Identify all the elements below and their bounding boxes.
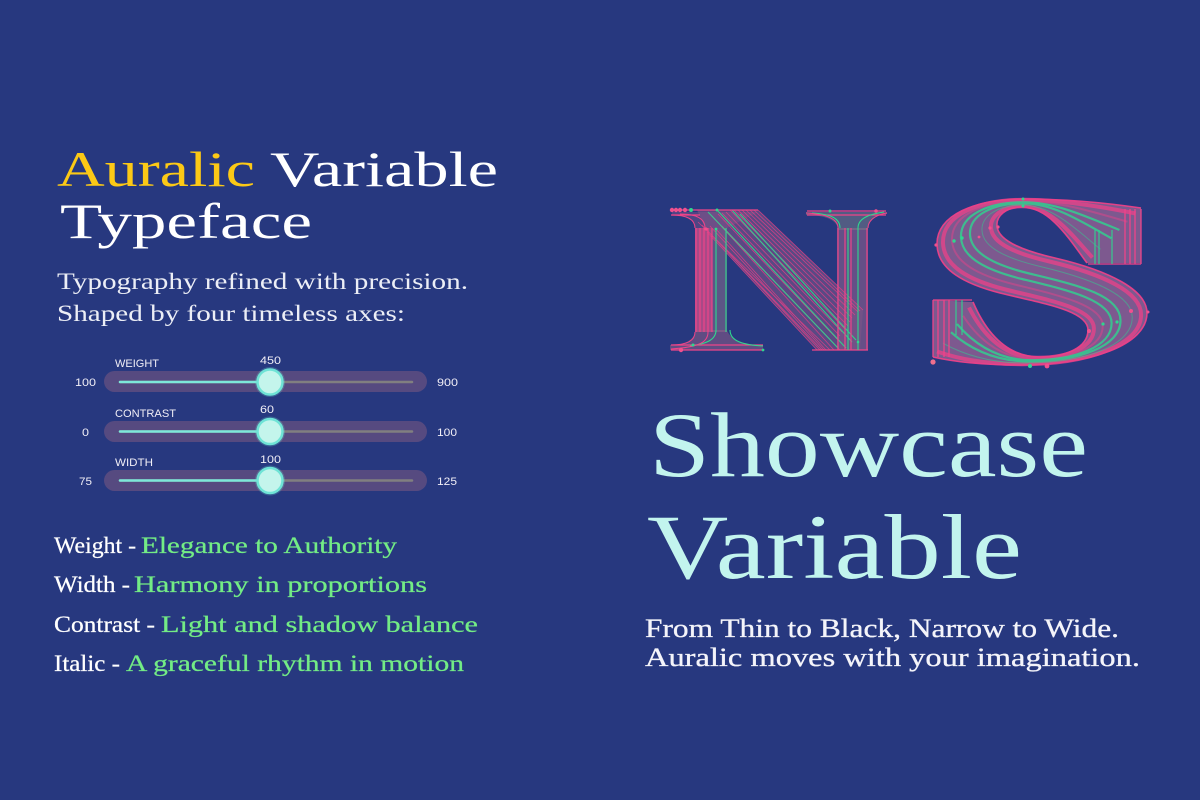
S terminals [933, 209, 1141, 357]
S anchor points [930, 198, 1150, 368]
N diagonal green lines [708, 210, 856, 348]
slider: weight [75, 355, 458, 397]
title: Auralic [57, 141, 255, 197]
S tinted body [933, 199, 1147, 365]
N tinted fills [670, 210, 887, 350]
slider: width: WIDTH [115, 457, 153, 469]
glyph illustration: letter S [930, 198, 1150, 368]
axis: contrast: Contrast - [54, 612, 155, 638]
S green core curves [943, 202, 1132, 363]
S green terminals [956, 230, 1112, 335]
axis: weight: Weight - [54, 533, 136, 559]
S pink edge curves [933, 199, 1147, 365]
S inner pink curves [937, 200, 1141, 364]
showcase heading [647, 394, 1088, 598]
slider: width: 100 [260, 454, 281, 466]
axis: width: Width - [54, 572, 130, 598]
title: Variable [270, 141, 498, 197]
intro text: Shaped by four timeless axes: [57, 301, 405, 326]
title [57, 141, 498, 249]
axis: italic [54, 651, 464, 677]
showcase caption [645, 614, 1140, 672]
title: Typeface [60, 193, 312, 249]
showcase heading: Showcase [649, 394, 1088, 496]
N anchor points [670, 208, 878, 352]
slider: width: 125 [437, 476, 457, 488]
slider: weight: WEIGHT [115, 358, 159, 370]
slider: contrast: 0 [82, 427, 89, 439]
intro text [57, 269, 468, 326]
glyph illustration: letter N [670, 208, 887, 352]
N stem lines [671, 210, 886, 350]
axis: italic: A graceful rhythm in motion [126, 651, 464, 677]
axis: weight: Elegance to Authority [141, 533, 397, 559]
axis: contrast [54, 612, 478, 638]
slider: weight: 900 [437, 377, 458, 389]
axis: weight [54, 533, 397, 559]
slider: contrast: CONTRAST [115, 408, 176, 420]
slider: weight: 100 [75, 377, 96, 389]
axis: width [54, 572, 427, 598]
intro text: Typography refined with precision. [57, 269, 468, 294]
axis list [54, 533, 478, 677]
axis: width: Harmony in proportions [134, 572, 427, 598]
slider: contrast: 100 [437, 427, 457, 439]
N stem green lines [690, 212, 884, 350]
slider: contrast: 60 [260, 404, 274, 416]
showcase caption: Auralic moves with your imagination. [645, 643, 1140, 672]
slider: width: 75 [79, 476, 92, 488]
N serif brackets [671, 213, 887, 349]
showcase caption: From Thin to Black, Narrow to Wide. [645, 614, 1119, 643]
slider: width [79, 454, 457, 496]
N diagonal pink lines [698, 210, 863, 350]
showcase heading: Variable [647, 496, 1022, 598]
slider: weight: 450 [260, 355, 281, 367]
slider panel [75, 355, 458, 496]
axis: contrast: Light and shadow balance [161, 612, 478, 638]
axis: italic: Italic - [54, 651, 120, 677]
slider: contrast [82, 404, 457, 446]
